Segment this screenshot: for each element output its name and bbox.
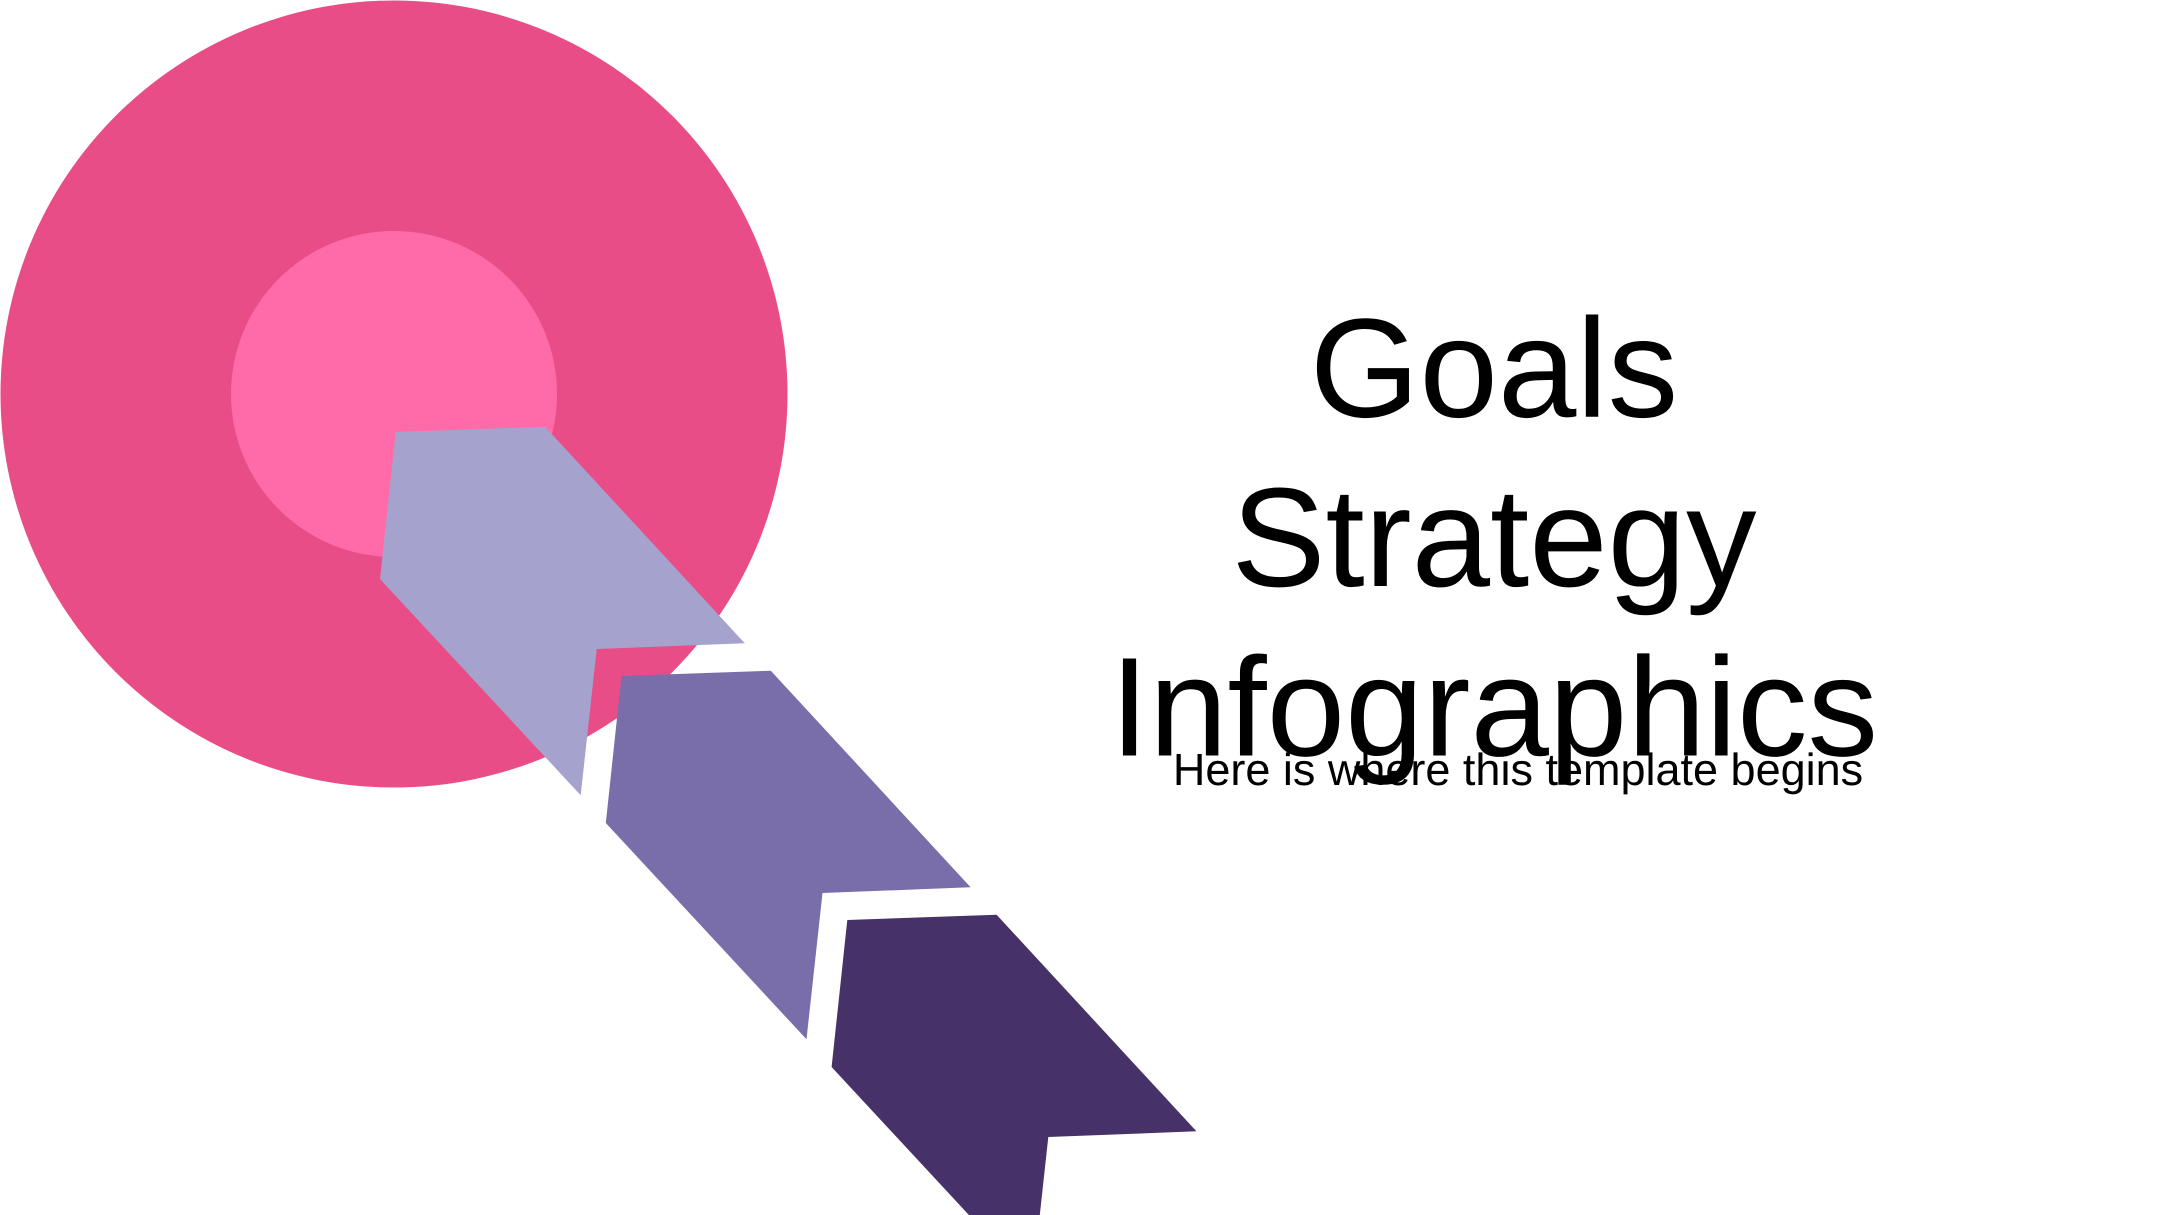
title — [1110, 289, 1878, 786]
subtitle: Here is where this template begins — [1173, 744, 1863, 795]
arrow segment 3: dark purple — [832, 915, 1196, 1215]
arrow segment 2: medium purple — [606, 671, 971, 1039]
title: Goals — [1310, 289, 1678, 447]
target: inner circle — [231, 231, 557, 557]
title: Infographics — [1110, 628, 1878, 786]
arrow segment 1: light lavender — [380, 427, 745, 795]
target: outer circle — [0, 0, 788, 788]
title: Strategy — [1231, 458, 1757, 616]
